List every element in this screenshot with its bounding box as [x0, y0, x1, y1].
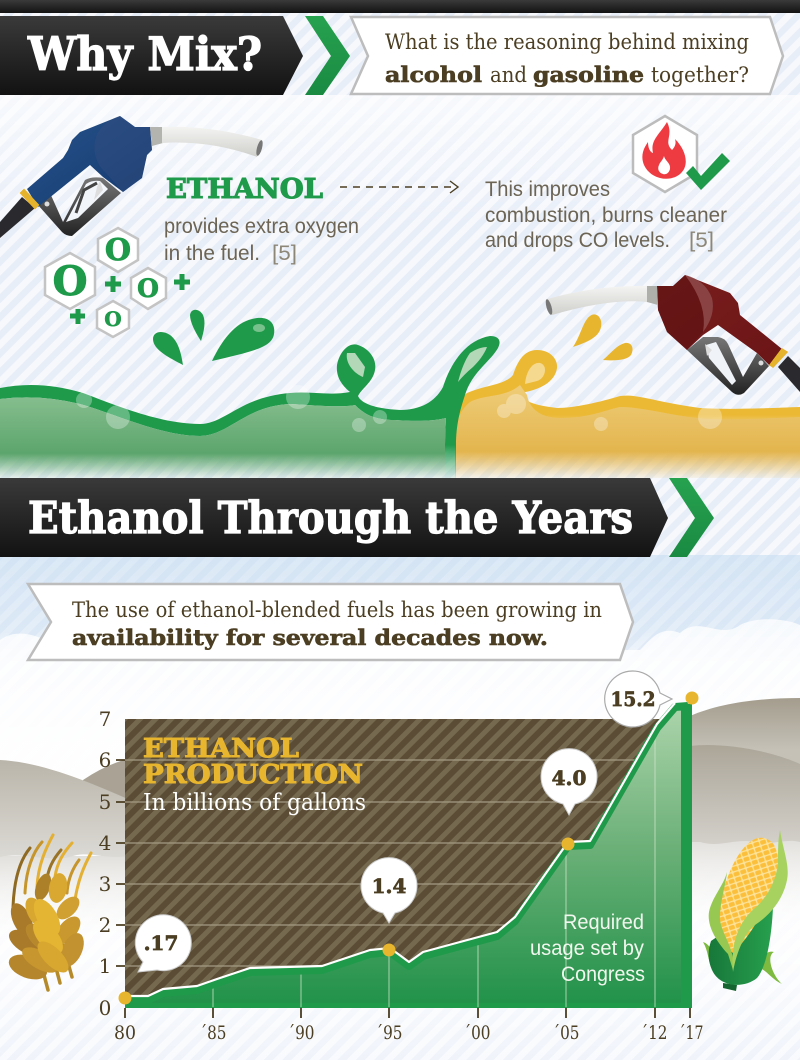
callout: 1.4: 1.4	[372, 874, 406, 898]
oxygen molecules	[45, 228, 190, 337]
annotation: required usage: usage set by	[530, 937, 644, 960]
text: this improves combustion: and drops CO levels.	[485, 229, 670, 252]
header: Why Mix?: Why Mix?	[27, 27, 262, 81]
icon: green chevron	[305, 16, 350, 95]
ribbon: question: and	[490, 63, 527, 87]
yellow droplets	[573, 314, 633, 360]
x axis labels: ´05	[552, 1022, 580, 1044]
bubbles in liquid	[76, 385, 722, 432]
hexagon: O right: O	[137, 274, 159, 303]
icon: corn	[703, 830, 788, 991]
label: ETHANOL: ETHANOL	[166, 174, 323, 205]
callout: 1.4	[361, 858, 417, 923]
ribbon: question	[351, 17, 783, 94]
y axis labels: 6	[99, 748, 111, 772]
icon: blue fuel nozzle	[0, 116, 264, 238]
ribbon: question: together?	[651, 63, 749, 87]
background: right hills	[690, 698, 800, 935]
text: this improves combustion: This improves	[485, 178, 610, 201]
header: Ethanol Through the Years: Ethanol Through the Years	[28, 493, 633, 544]
icon: red fuel nozzle	[544, 275, 800, 395]
annotation: required usage	[530, 911, 645, 986]
top strip	[0, 0, 800, 13]
x axis labels: ´12	[640, 1022, 668, 1044]
hexagon: O top: O	[105, 233, 131, 268]
text: provides extra oxygen	[164, 215, 359, 265]
chart title: ETHANOL	[143, 734, 299, 764]
y axis labels: 0	[99, 996, 111, 1020]
hexagon: O bottom	[97, 301, 129, 337]
annotation: required usage: Congress	[561, 963, 645, 986]
callout: .17: .17	[144, 931, 178, 955]
text: this improves combustion: [5]	[689, 229, 714, 252]
background: left hills	[0, 758, 130, 945]
ribbon: growth statement: availability for several decades now.	[72, 625, 548, 650]
ribbon: growth statement	[28, 584, 633, 660]
x axis labels: ´90	[288, 1022, 314, 1044]
hexagon: O bottom: O	[104, 307, 122, 331]
x axis labels	[114, 1022, 704, 1044]
text: this improves combustion: combustion, burns cleaner	[485, 204, 727, 227]
hexagon: O large: O	[53, 258, 87, 305]
callout: 4.0	[541, 749, 597, 815]
ribbon: question: alcohol	[385, 62, 482, 87]
x axis labels: ´95	[376, 1022, 402, 1044]
y axis labels: 2	[99, 913, 111, 937]
ribbon: question: What is the reasoning behind mixing	[385, 30, 749, 54]
y axis labels: 5	[99, 790, 111, 814]
callout: 15.2	[605, 671, 672, 727]
data points	[118, 692, 698, 1004]
header: Why Mix?	[0, 16, 303, 95]
liquid: ethanol green	[0, 336, 500, 478]
chart plot background	[125, 719, 660, 997]
y axis labels: 7	[99, 707, 111, 731]
arrow: dashed	[340, 181, 458, 193]
callout: 15.2: 15.2	[610, 687, 656, 711]
chart title: In billions of gallons	[143, 790, 366, 816]
ribbon: growth statement: The use of ethanol-blended fuels has been growing in	[72, 598, 602, 622]
callout: .17	[135, 915, 191, 972]
hexagon: O right	[131, 268, 166, 309]
x axis labels: ´00	[464, 1022, 490, 1044]
text: provides extra oxygen: [5]	[272, 242, 297, 265]
header: Ethanol Through the Years	[0, 478, 668, 557]
ribbon: question: gasoline	[533, 62, 644, 87]
green droplets	[153, 310, 274, 365]
x axis labels: ´17	[678, 1022, 704, 1044]
green area	[125, 702, 692, 1008]
callout: 4.0: 4.0	[552, 766, 586, 790]
y axis labels: 3	[99, 872, 111, 896]
text: this improves combustion	[485, 178, 727, 252]
y axis labels: 4	[99, 831, 111, 855]
text: provides extra oxygen: in the fuel.	[164, 242, 260, 265]
icon: wheat	[5, 835, 91, 990]
chart: ethanol production	[99, 671, 704, 1044]
x axis labels: ´85	[200, 1022, 226, 1044]
background: clouds	[0, 619, 800, 1060]
icon: flame hexagon with check	[633, 116, 730, 192]
liquid: gasoline yellow	[455, 350, 800, 478]
plus signs	[70, 274, 190, 324]
chart title	[143, 734, 366, 816]
y axis labels	[99, 707, 111, 1020]
text: provides extra oxygen: provides extra oxygen	[164, 215, 359, 238]
y axis labels: 1	[99, 954, 111, 978]
hexagon: O large	[45, 253, 95, 309]
hexagon: O top	[98, 228, 138, 272]
x axis labels: 80	[114, 1022, 136, 1044]
chart title: PRODUCTION	[143, 760, 363, 790]
icon: green chevron 2	[669, 478, 714, 557]
axis ticks	[116, 760, 690, 1018]
annotation: required usage: Required	[563, 911, 644, 934]
